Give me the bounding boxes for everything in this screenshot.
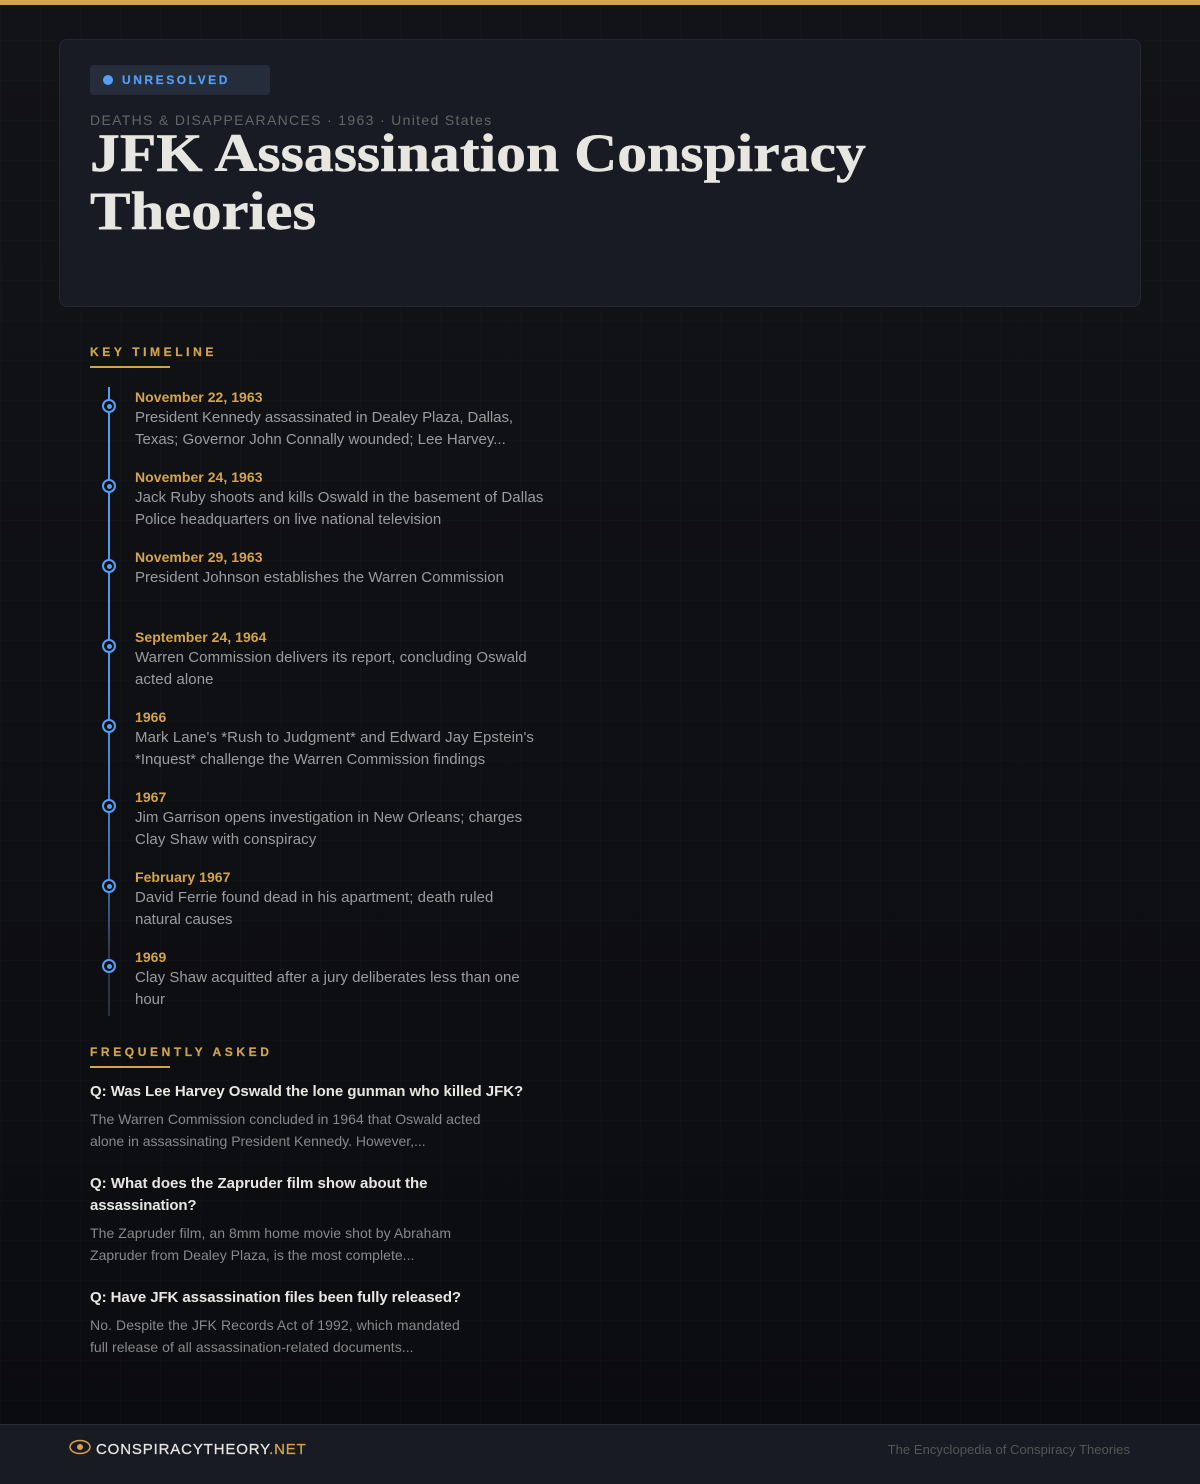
faq item 3: Q: Have JFK assassination files been fully released?	[90, 1289, 461, 1306]
heading: frequently asked: FREQUENTLY ASKED	[90, 1045, 273, 1059]
marker 2	[102, 479, 116, 493]
event: 1966	[135, 709, 534, 768]
faq item 1: The Warren Commission concluded in 1964 that Oswald acted	[90, 1111, 481, 1127]
faq item 2	[90, 1175, 451, 1263]
panel: header	[59, 39, 1141, 307]
title: Theories	[90, 181, 316, 241]
marker 7	[102, 879, 116, 893]
faq item 1	[90, 1083, 523, 1149]
icon: eye	[69, 1440, 91, 1454]
event: November 22, 1963: November 22, 1963	[135, 389, 263, 405]
event: November 24, 1963	[135, 469, 544, 528]
tagline: The Encyclopedia of Conspiracy Theories	[888, 1442, 1130, 1457]
event: February 1967: David Ferrie found dead in his apartment; death ruled	[135, 889, 493, 906]
top accent bar	[0, 0, 1200, 5]
event: 1966: 1966	[135, 709, 166, 725]
faq item 3	[90, 1289, 461, 1355]
event: 1969: 1969	[135, 949, 166, 965]
event: September 24, 1964: Warren Commission delivers its report, concluding Oswald	[135, 649, 527, 666]
logo wordmark: CONSPIRACYTHEORY.NET	[96, 1441, 307, 1458]
event: September 24, 1964	[135, 629, 527, 688]
faq item 3: full release of all assassination-related documents...	[90, 1339, 414, 1355]
badge label: UNRESOLVED	[122, 73, 230, 87]
event: 1969	[135, 949, 520, 1008]
event: 1967: Jim Garrison opens investigation in New Orleans; charges	[135, 809, 522, 826]
faq item 3: No. Despite the JFK Records Act of 1992, which mandated	[90, 1317, 460, 1333]
event: 1966: *Inquest* challenge the Warren Commission findings	[135, 751, 485, 768]
event: November 24, 1963: Police headquarters on live national television	[135, 511, 441, 528]
heading: key timeline: KEY TIMELINE	[90, 345, 217, 359]
title: JFK Assassination Conspiracy	[90, 123, 866, 183]
event: February 1967: February 1967	[135, 869, 230, 885]
faq item 1: alone in assassinating President Kennedy. However,...	[90, 1133, 426, 1149]
event: November 24, 1963: November 24, 1963	[135, 469, 263, 485]
faq item 1: Q: Was Lee Harvey Oswald the lone gunman who killed JFK?	[90, 1083, 523, 1100]
event: November 29, 1963: President Johnson establishes the Warren Commission	[135, 569, 504, 586]
marker 3	[102, 559, 116, 573]
category line: DEATHS & DISAPPEARANCES · 1963 · United States	[90, 112, 492, 128]
faq item 2: Q: What does the Zapruder film show about the	[90, 1175, 428, 1192]
marker 1	[102, 399, 116, 413]
event: September 24, 1964: acted alone	[135, 671, 214, 688]
timeline	[108, 387, 110, 1016]
event: November 22, 1963: President Kennedy assassinated in Dealey Plaza, Dallas,	[135, 409, 513, 426]
event: November 22, 1963	[135, 389, 513, 448]
marker 6	[102, 799, 116, 813]
event: November 24, 1963: Jack Ruby shoots and kills Oswald in the basement of Dallas	[135, 489, 544, 506]
footer	[0, 1424, 1200, 1484]
event: 1969: hour	[135, 991, 165, 1008]
icon: status dot	[103, 75, 113, 85]
event: 1967: Clay Shaw with conspiracy	[135, 831, 316, 848]
event: November 29, 1963	[135, 549, 504, 586]
event: November 29, 1963: November 29, 1963	[135, 549, 263, 565]
event: 1969: Clay Shaw acquitted after a jury deliberates less than one	[135, 969, 520, 986]
faq item 2: The Zapruder film, an 8mm home movie shot by Abraham	[90, 1225, 451, 1241]
marker 5	[102, 719, 116, 733]
event: 1966: Mark Lane's *Rush to Judgment* and Edward Jay Epstein's	[135, 729, 534, 746]
faq item 2: Zapruder from Dealey Plaza, is the most complete...	[90, 1247, 414, 1263]
title	[90, 123, 866, 241]
marker 4	[102, 639, 116, 653]
badge: unresolved	[90, 65, 270, 95]
event: September 24, 1964: September 24, 1964	[135, 629, 266, 645]
event: November 22, 1963: Texas; Governor John Connally wounded; Lee Harvey...	[135, 431, 506, 448]
event: February 1967: natural causes	[135, 911, 233, 928]
faq item 2: assassination?	[90, 1197, 196, 1214]
event: 1967: 1967	[135, 789, 166, 805]
event: February 1967	[135, 869, 493, 928]
marker 8	[102, 959, 116, 973]
event: 1967	[135, 789, 522, 848]
